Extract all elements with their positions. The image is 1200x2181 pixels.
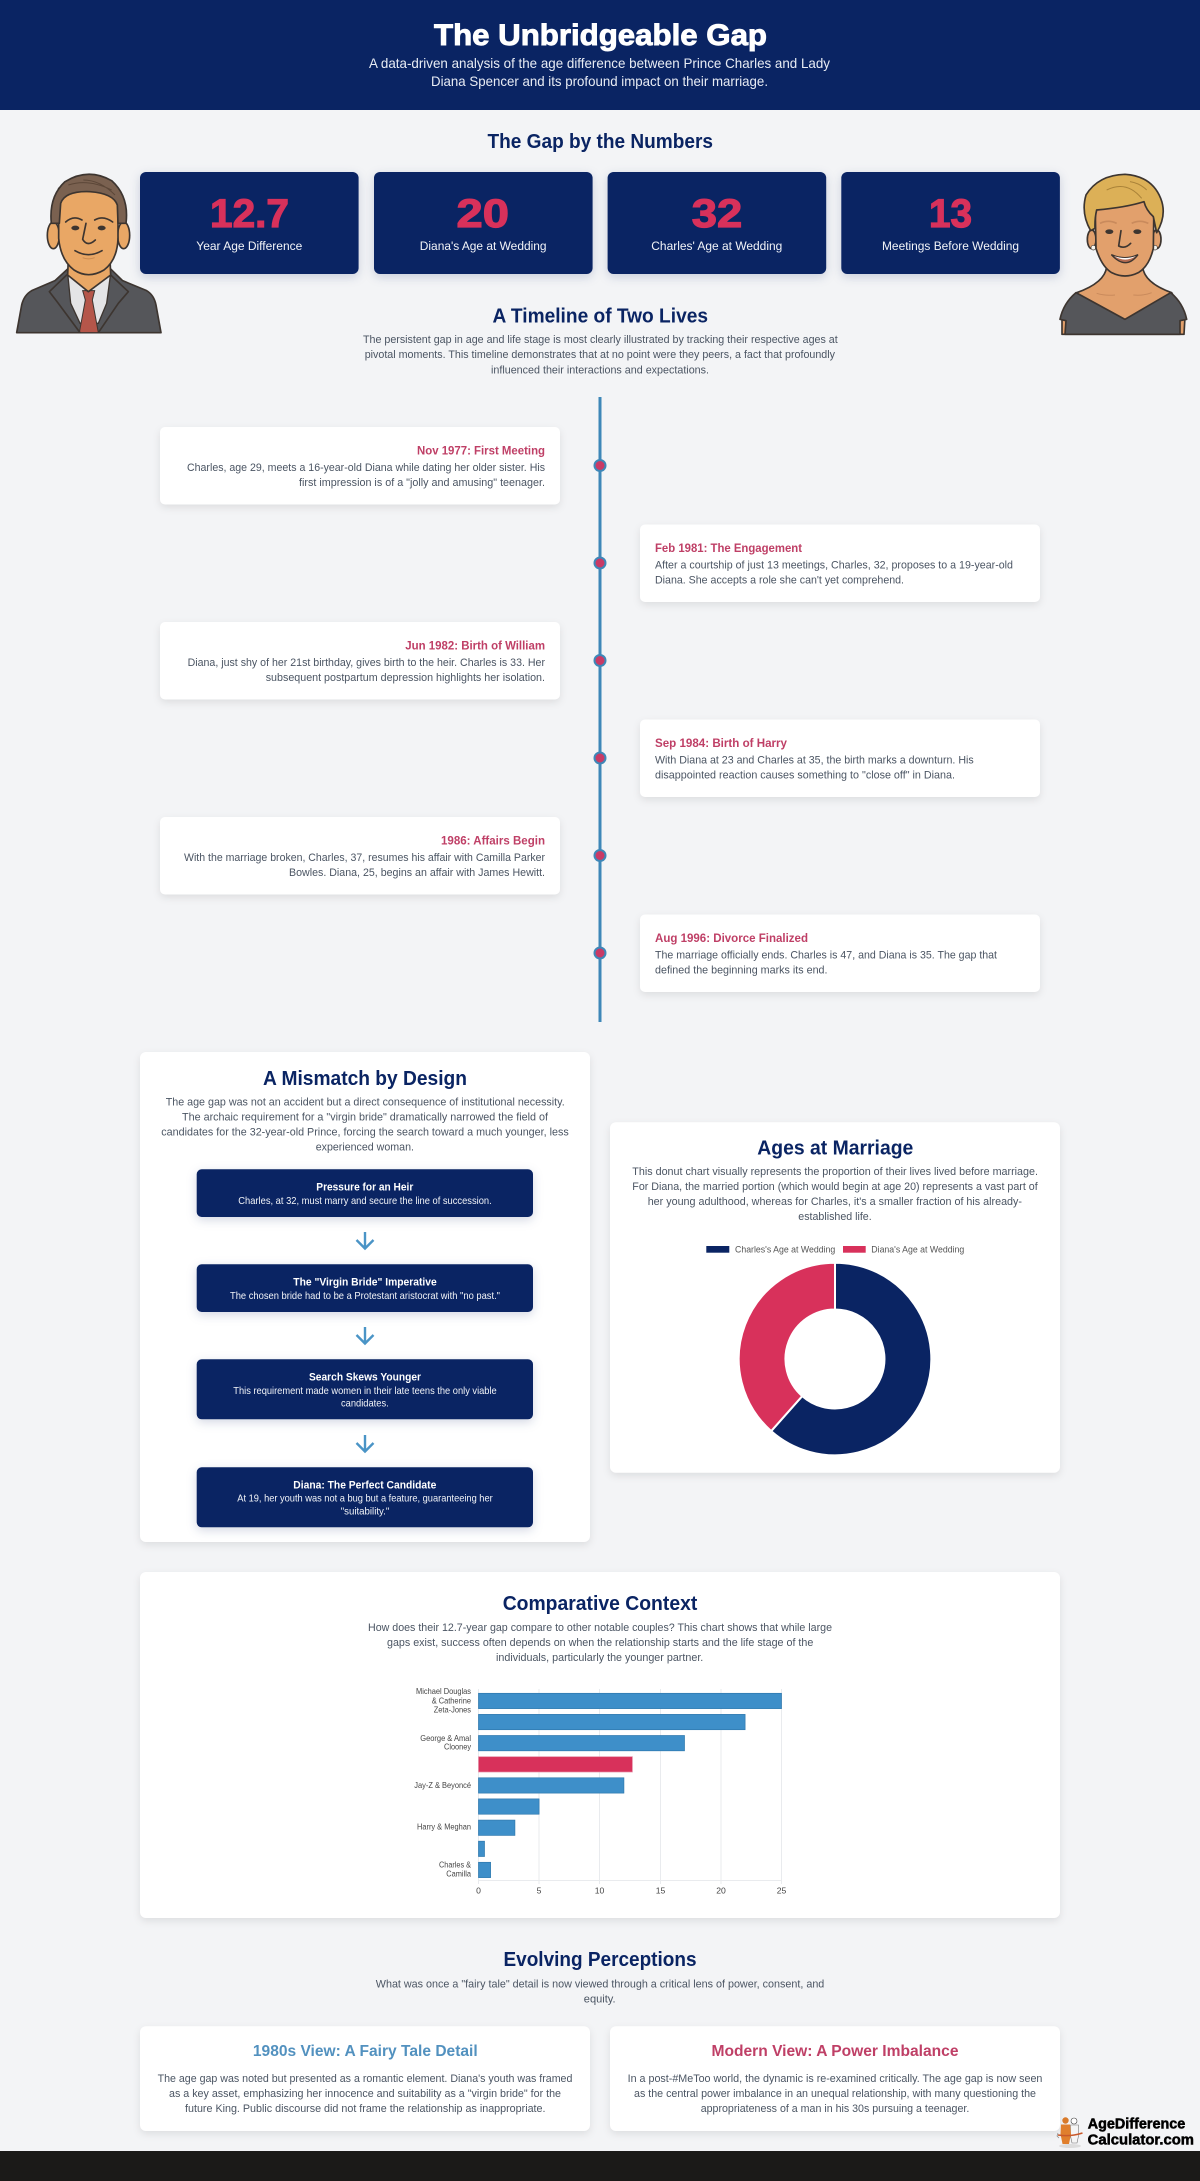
couple labels: Camilla [446,1868,471,1878]
axis tick labels: 5 [537,1886,542,1896]
timeline event: Aug 1996 [594,914,1040,992]
ages text [632,1166,1038,1223]
flow box: pressure for an heir: Charles, at 32, must marry and secure the line of succession. [238,1196,492,1207]
flow box: search skews younger: candidates. [341,1399,389,1410]
couple labels: Jay-Z & Beyoncé [414,1780,471,1790]
panel: a mismatch by design [140,1052,590,1542]
timeline event: 1986: 1986: Affairs Begin [441,834,545,848]
mismatch text: The archaic requirement for a "virgin bride" dramatically narrowed the field of [182,1112,549,1124]
comparative text: How does their 12.7-year gap compare to other notable couples? This chart shows that while large [368,1622,832,1634]
couple labels: Harry & Meghan [417,1822,471,1832]
heading: the gap by the numbers: The Gap by the Numbers [488,131,713,153]
couple labels: & Catherine [432,1695,471,1705]
logo icon [1057,2117,1082,2148]
flow box: virgin bride: The chosen bride had to be a Protestant aristocrat with "no past." [230,1291,500,1302]
timeline event: Sep 1984 [594,720,1040,797]
card: modern view: In a post-#MeToo world, the dynamic is re-examined critically. The age gap is now seen [628,2073,1042,2085]
subtitle [369,55,830,89]
card: 1980s view: future King. Public discourse did not frame the relationship as inappropriate. [185,2103,546,2115]
card: modern view: as the central power imbalance in an unequal relationship, with many questioning the [634,2088,1036,2100]
logo text: Calculator.com [1088,2132,1194,2148]
axis tick labels: 15 [656,1886,665,1896]
stat card: 12.7: 12.7 [210,192,289,236]
panel: ages at marriage [610,1122,1060,1473]
timeline event: Jun 1982: Diana, just shy of her 21st birthday, gives birth to the heir. Charles is 33. Her [188,657,545,669]
couple labels: Charles & [439,1860,471,1870]
card: 1980s view: The age gap was noted but presented as a romantic element. Diana's youth was framed [158,2073,572,2085]
heading: ages: Ages at Marriage [757,1137,913,1159]
couple labels: Zeta-Jones [434,1704,471,1714]
timeline event: Feb 1981: Feb 1981: The Engagement [655,541,802,555]
timeline intro text: The persistent gap in age and life stage is most clearly illustrated by tracking their respective ages at [363,334,838,346]
mismatch text [161,1097,569,1154]
arrow 2 [356,1327,374,1344]
timeline intro text: pivotal moments. This timeline demonstrates that at no point were they peers, a fact that profoundly [365,349,835,361]
title: The Unbridgeable Gap [434,19,767,52]
timeline intro text: influenced their interactions and expectations. [491,364,709,376]
panel: comparative context [140,1572,1060,1918]
heading: mismatch: A Mismatch by Design [263,1068,467,1090]
flow box: virgin bride: The "Virgin Bride" Imperative [293,1277,437,1289]
timeline event: Aug 1996: defined the beginning marks its end. [655,964,828,976]
logo text: AgeDifference [1088,2117,1185,2133]
card: modern view: appropriateness of a man in his 30s pursuing a teenager. [701,2103,969,2115]
stat card: 12.7 [140,172,359,274]
flow box: perfect candidate [197,1467,533,1527]
stat card: 32: 32 [692,192,742,236]
timeline event: Nov 1977: Nov 1977: First Meeting [417,444,545,458]
comparative text [368,1622,832,1664]
illustration: Charles portrait [17,174,161,333]
stat card: 20 [374,172,593,274]
chart legend [706,1244,964,1254]
timeline event: 1986: With the marriage broken, Charles, 37, resumes his affair with Camilla Parker [184,852,545,864]
timeline event: Jun 1982: subsequent postpartum depression highlights her isolation. [266,672,545,684]
heading: evolving perceptions: Evolving Perceptions [504,1949,696,1971]
mismatch text: The age gap was not an accident but a direct consequence of institutional necessity. [166,1097,565,1109]
flow box: perfect candidate: "suitability." [341,1506,390,1517]
timeline event: 1986: Bowles. Diana, 25, begins an affair with James Hewitt. [289,867,545,879]
timeline event: 1986 [160,817,606,894]
flow box: perfect candidate: Diana: The Perfect Candidate [293,1479,436,1491]
subtitle: A data-driven analysis of the age difference between Prince Charles and Lady [369,55,830,71]
arrow 3 [356,1435,374,1452]
card: 1980s view: 1980s View: A Fairy Tale Detail [253,2043,478,2060]
axis tick labels: 20 [716,1886,726,1896]
card: modern view [610,2026,1060,2131]
bar chart [414,1686,786,1896]
ages text: established life. [798,1211,872,1223]
stat card: 12.7: Year Age Difference [196,239,303,253]
timeline event: Sep 1984: disappointed reaction causes something to "close off" in Diana. [655,770,955,782]
flow box: virgin bride [197,1264,533,1312]
timeline event: Nov 1977: Charles, age 29, meets a 16-year-old Diana while dating her older sister. His [187,462,545,474]
card: 1980s view [140,2026,590,2131]
flow box: search skews younger: Search Skews Younger [309,1372,422,1384]
couple labels: Michael Douglas [416,1686,471,1696]
stat cards row [140,172,1060,274]
donut chart [739,1263,931,1455]
heading: comparative: Comparative Context [503,1593,698,1615]
evolving text [376,1978,824,2005]
card: 1980s view: as a key asset, emphasizing her innocence and suitability as a "virgin bride" for the [169,2088,561,2100]
ages text: her young adulthood, whereas for Charles, it's a smaller fraction of his already- [648,1196,1022,1208]
illustration: Diana portrait [1060,174,1187,334]
timeline event: Feb 1981: After a courtship of just 13 meetings, Charles, 32, proposes to a 19-year-old [655,560,1013,572]
stat card: 32: Charles' Age at Wedding [651,239,782,253]
logo: age difference calculator [1057,2117,1194,2148]
timeline event: Jun 1982: Jun 1982: Birth of William [405,638,545,652]
timeline axis [598,397,602,1022]
chart legend: Diana's Age at Wedding [871,1244,964,1254]
timeline intro text [363,334,838,376]
stat card: 13 [841,172,1060,274]
timeline event: Feb 1981: Diana. She accepts a role she can't yet comprehend. [655,574,904,586]
couple labels [414,1686,472,1878]
arrow 1 [356,1232,374,1248]
axis tick labels: 10 [595,1886,604,1896]
evolving text: What was once a "fairy tale" detail is now viewed through a critical lens of power, consent, and [376,1978,824,1990]
timeline event: Feb 1981 [594,524,1040,602]
chart legend: Charles's Age at Wedding [735,1244,835,1254]
ages text: For Diana, the married portion (which would begin at age 20) represents a vast part of [632,1181,1038,1193]
couple labels: Clooney [444,1742,472,1752]
timeline event: Sep 1984: With Diana at 23 and Charles at 35, the birth marks a downturn. His [655,754,974,766]
timeline event: Sep 1984: Sep 1984: Birth of Harry [655,736,787,750]
timeline event: Nov 1977 [160,427,606,504]
flow box: perfect candidate: At 19, her youth was not a bug but a feature, guaranteeing her [237,1494,493,1505]
stat card: 32 [608,172,826,274]
flow box: pressure for an heir: Pressure for an Heir [316,1181,414,1193]
couple labels: George & Amal [420,1733,471,1743]
timeline event: Nov 1977: first impression is of a "jolly and amusing" teenager. [299,477,545,489]
subtitle: Diana Spencer and its profound impact on their marriage. [431,73,768,89]
timeline event: Aug 1996: Aug 1996: Divorce Finalized [655,931,808,945]
flow box: pressure for an heir [197,1169,533,1217]
footer bar [0,2151,1200,2181]
mismatch text: experienced woman. [316,1142,414,1154]
axis tick labels [476,1886,786,1896]
flow box: search skews younger [197,1359,533,1419]
header banner [0,0,1200,110]
stat card: 13: Meetings Before Wedding [882,239,1019,253]
timeline [160,397,1040,1022]
timeline event: Jun 1982 [160,622,606,700]
comparative text: gaps exist, success often depends on when the relationship starts and the life stage of the [387,1637,813,1649]
comparative text: individuals, particularly the younger partner. [496,1652,703,1664]
logo text [1088,2117,1194,2148]
axis tick labels: 0 [476,1886,481,1896]
stat card: 20: 20 [456,192,509,236]
stat card: 13: 13 [929,192,972,236]
mismatch text: candidates for the 32-year-old Prince, forcing the search toward a much younger, less [161,1127,569,1139]
heading: timeline: A Timeline of Two Lives [492,306,708,328]
ages text: This donut chart visually represents the proportion of their lives lived before marriage. [632,1166,1038,1178]
timeline event: Aug 1996: The marriage officially ends. Charles is 47, and Diana is 35. The gap that [655,950,997,962]
axis tick labels: 25 [777,1886,786,1896]
card: modern view: Modern View: A Power Imbalance [712,2043,959,2060]
stat card: 20: Diana's Age at Wedding [420,239,546,253]
evolving text: equity. [584,1993,616,2005]
flow box: search skews younger: This requirement made women in their late teens the only viable [233,1386,497,1397]
